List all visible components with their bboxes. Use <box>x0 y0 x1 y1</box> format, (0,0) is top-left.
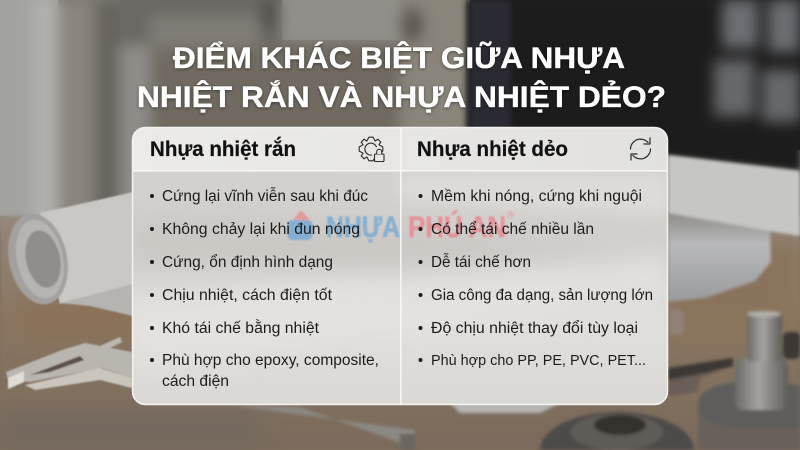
watermark logo <box>287 210 515 244</box>
right column bullets: Dễ tái chế hơn <box>431 254 531 271</box>
left column bullets: Phù hợp cho epoxy, composite, <box>162 352 379 369</box>
monitor <box>466 0 800 170</box>
right column bullets: Độ chịu nhiệt thay đổi tùy loại <box>431 320 638 337</box>
left column bullets: Không chảy lại khi đun nóng <box>162 221 360 238</box>
blueprint roll <box>0 192 133 316</box>
ruler strip <box>230 405 415 448</box>
icon: gear with lock <box>359 137 384 162</box>
left column bullets: cách điện <box>162 373 229 390</box>
right column bullets: Phù hợp cho PP, PE, PVC, PET... <box>431 352 646 369</box>
metal parts <box>400 309 800 450</box>
left column bullets: Cứng lại vĩnh viễn sau khi đúc <box>162 188 368 205</box>
right column bullets: Gia công đa dạng, sản lượng lớn <box>431 287 653 304</box>
caliper <box>6 337 132 390</box>
left column bullets: Khó tái chế bằng nhiệt <box>162 320 320 337</box>
icon: refresh arrows <box>630 138 650 160</box>
title: NHIỆT RẮN VÀ NHỰA NHIỆT DẺO? <box>137 80 666 114</box>
right column heading: Nhựa nhiệt dẻo <box>417 138 568 161</box>
left column bullets: Cứng, ổn định hình dạng <box>162 254 333 271</box>
wood shading <box>0 240 800 450</box>
left column bullets <box>150 188 379 390</box>
watermark logo: PHÚ AN <box>408 210 506 244</box>
watermark logo: ® <box>507 210 515 221</box>
title: ĐIỂM KHÁC BIỆT GIỮA NHỰA <box>173 41 625 75</box>
right column bullets: Có thể tái chế nhiều lần <box>431 221 594 238</box>
left column heading: Nhựa nhiệt rắn <box>150 137 296 161</box>
comparison table panel <box>132 127 668 405</box>
title <box>137 41 666 114</box>
right column: nhựa nhiệt dẻo <box>417 138 653 369</box>
right column bullets <box>418 188 653 369</box>
watermark logo: NHỰA <box>326 211 400 244</box>
right column bullets: Mềm khi nóng, cứng khi nguội <box>431 188 642 205</box>
left column bullets: Chịu nhiệt, cách điện tốt <box>162 287 333 304</box>
left column: nhựa nhiệt rắn <box>150 137 384 390</box>
